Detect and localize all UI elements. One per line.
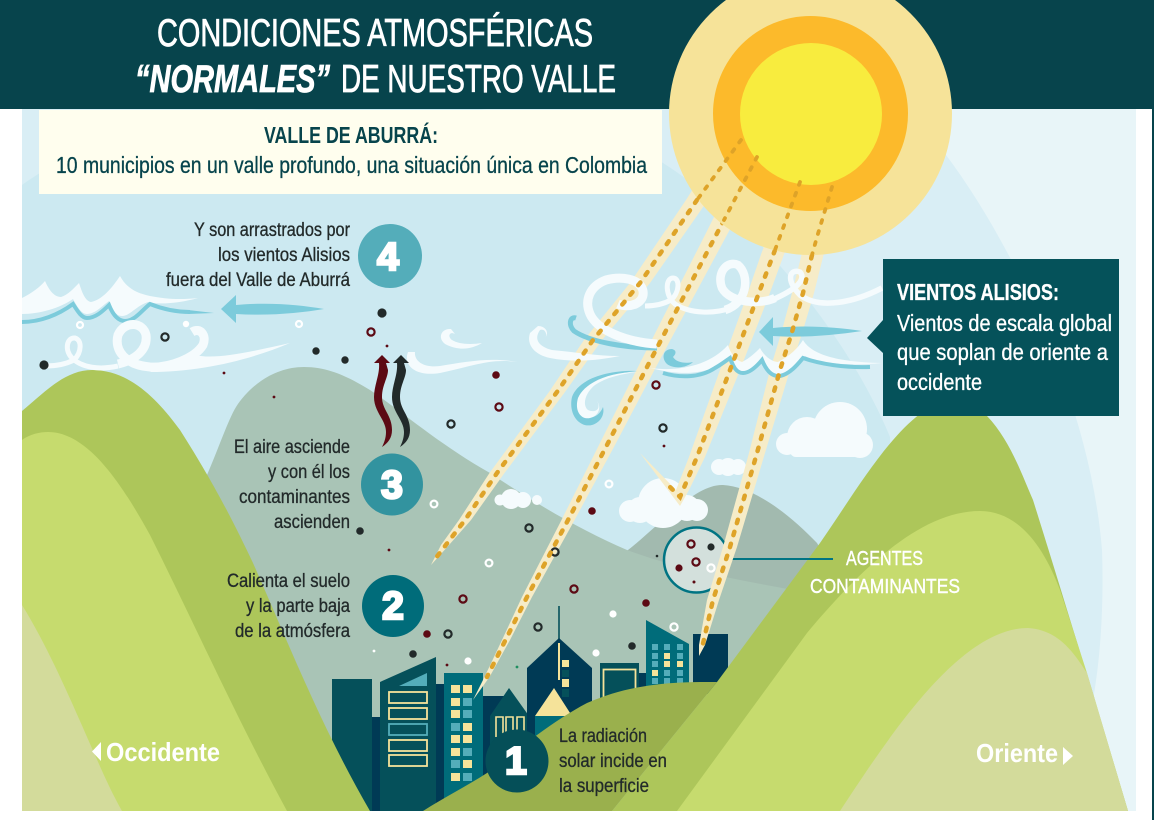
wind: right wave [650, 340, 882, 376]
info box: Valle de Aburrá [39, 110, 662, 194]
step 3: y con él los [268, 462, 350, 483]
step 1: La radiación [559, 726, 647, 747]
step 3 [234, 437, 423, 533]
inset circle: agentes contaminantes [664, 528, 833, 592]
header band [0, 0, 1154, 109]
step 4 [166, 220, 422, 291]
step 2: Calienta el suelo [227, 571, 350, 592]
step 3: 3 [381, 464, 403, 507]
dotted rays over sun [697, 140, 832, 255]
arrow: wind direction right group [759, 317, 862, 346]
title: “NORMALES” [135, 58, 331, 101]
step 4: los vientos Alisios [218, 245, 350, 266]
background mountains [190, 367, 900, 811]
city buildings [332, 606, 728, 811]
step 4: Y son arrastrados por [194, 220, 351, 241]
step 1: la superficie [559, 776, 649, 797]
arrow: wind direction left [221, 295, 324, 323]
label: occidente: Occidente [106, 737, 220, 767]
step 4: 4 [377, 236, 399, 279]
left hills [22, 370, 370, 811]
wind: right swirl with blue underline [570, 264, 882, 348]
callout: vientos alisios: Vientos de escala global [897, 310, 1112, 336]
title [135, 12, 616, 101]
step 2: y la parte baja [246, 596, 350, 617]
label: oriente: Oriente [976, 738, 1058, 768]
callout: vientos alisios [867, 259, 1119, 416]
icon: sun [669, 0, 952, 255]
rising air arrows [374, 355, 410, 447]
step 2: de la atmósfera [235, 621, 350, 642]
info box: Valle de Aburrá: 10 municipios en un valle profundo, una situación única en Colombia [56, 152, 647, 178]
clouds [494, 402, 873, 528]
callout: vientos alisios: VIENTOS ALISIOS: [897, 279, 1059, 305]
callout: vientos alisios: que soplan de oriente a [897, 339, 1108, 365]
wind: left curls [46, 324, 290, 372]
step 3: El aire asciende [234, 437, 350, 458]
label: agentes contaminantes: AGENTES [846, 547, 923, 570]
step 2 [227, 571, 424, 642]
pollution particles [39, 308, 678, 668]
right hills [423, 405, 1128, 811]
label: agentes contaminantes [810, 547, 960, 598]
step 3: contaminantes [239, 487, 350, 508]
step 1: solar incide en [559, 751, 667, 772]
dotted sun rays [432, 200, 812, 677]
wind: centre swirls [407, 326, 620, 374]
wind: lower swirl [571, 371, 637, 425]
step 1: 1 [505, 740, 527, 783]
wind: left wave [22, 276, 214, 322]
step 4: fuera del Valle de Aburrá [166, 270, 350, 291]
label: agentes contaminantes: CONTAMINANTES [810, 575, 960, 598]
sun beams [431, 157, 843, 700]
info box: Valle de Aburrá: VALLE DE ABURRÁ: [264, 121, 438, 148]
step 1 [486, 726, 667, 797]
step 2: 2 [382, 585, 404, 628]
callout: vientos alisios: occidente [897, 369, 982, 395]
title: DE NUESTRO VALLE [341, 58, 616, 101]
title: CONDICIONES ATMOSFÉRICAS [157, 12, 593, 55]
step 3: ascienden [274, 512, 350, 533]
